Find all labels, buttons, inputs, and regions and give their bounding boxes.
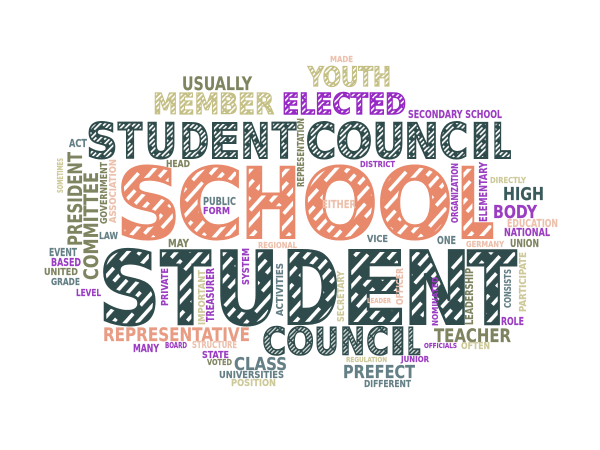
word: CLASS: CLASS (234, 354, 287, 375)
word: STUDENT top: D (180, 114, 209, 170)
word: STRUCTURE: STRUCTURE (192, 340, 237, 351)
word: SCHOOL: C (177, 148, 243, 260)
word: PREFECT: PREFECT (343, 362, 416, 383)
word: COUNCIL lower: O (286, 319, 314, 363)
word: COUNCIL lower: L (407, 319, 420, 363)
word: BASED: BASED (51, 256, 81, 269)
word: OFFICIALS: OFFICIALS (424, 342, 457, 350)
word: STUDENT top: N (241, 114, 270, 170)
word: LEVEL: LEVEL (76, 288, 101, 299)
word: OFFICER: OFFICER (395, 268, 406, 305)
word: PRIVATE: PRIVATE (160, 268, 171, 306)
word: HIGH: HIGH (503, 184, 544, 205)
word: REGIONAL: REGIONAL (258, 240, 297, 250)
word: TEACHER: TEACHER (434, 325, 511, 347)
word: NOMINATED: NOMINATED (430, 277, 440, 326)
word: BOARD: BOARD (165, 340, 187, 350)
word: SECRETARY: SECRETARY (336, 270, 347, 322)
word: GRADE: GRADE (51, 277, 80, 288)
word: COUNCIL lower: C (262, 319, 286, 363)
word: SOMETIMES: SOMETIMES (55, 158, 65, 193)
word: LEADERSHIP: LEADERSHIP (463, 268, 476, 325)
word: COUNCIL top: C (439, 114, 468, 170)
word: CONSISTS: CONSISTS (503, 269, 514, 308)
word: STUDENT top: T (118, 114, 142, 170)
word: MANY: MANY (133, 342, 160, 355)
word: DIFFERENT: DIFFERENT (364, 379, 411, 390)
word: REGULATION: REGULATION (346, 356, 387, 364)
word: COUNCIL lower: U (314, 319, 339, 363)
word: UNITED: UNITED (44, 267, 78, 278)
word: SCHOOL: O (377, 148, 453, 260)
word: EVENT: EVENT (49, 246, 77, 259)
word: COUNCIL top: L (492, 114, 511, 170)
word: STUDENT large: N (403, 230, 471, 348)
word: COUNCIL lower: I (389, 319, 407, 363)
word: GOVERNMENT: GOVERNMENT (99, 162, 110, 224)
word: EDUCATION: EDUCATION (507, 217, 558, 230)
word: COUNCIL top: O (336, 114, 372, 170)
word: REPRESENTATION: REPRESENTATION (296, 118, 307, 187)
word: PARTICIPATE: PARTICIPATE (518, 252, 529, 312)
word: STUDENT top: T (272, 114, 296, 170)
word: REPRESENTATIVE: REPRESENTATIVE (103, 324, 250, 346)
word: VICE: VICE (367, 234, 388, 245)
word: STUDENT large: T (468, 230, 517, 348)
word: UNION: UNION (510, 237, 539, 250)
word: BODY: BODY (493, 202, 538, 223)
word: SCHOOL: L (457, 148, 494, 260)
word: LAW: LAW (99, 231, 118, 242)
word: SECONDARY SCHOOL: SECONDARY SCHOOL (408, 108, 502, 121)
word: NATIONAL: NATIONAL (504, 226, 550, 239)
word: DISTRICT: DISTRICT (360, 159, 395, 169)
word: PRESIDENT: PRESIDENT (64, 152, 87, 246)
word: ELECTED: ELECTED (282, 88, 406, 121)
word: STUDENT large: D (282, 230, 340, 348)
word: STUDENT top: U (145, 114, 177, 170)
word: OFTEN: OFTEN (461, 341, 490, 352)
word: JUNIOR: JUNIOR (400, 354, 430, 364)
word: TREASURER: TREASURER (204, 268, 217, 322)
word: STATE: STATE (202, 350, 229, 361)
word: IMPORTANT: IMPORTANT (197, 270, 208, 325)
word: COUNCIL top: N (404, 114, 439, 170)
word: ELEMENTARY: ELEMENTARY (477, 161, 490, 222)
word: YOUTH: YOUTH (307, 62, 391, 93)
word: STUDENT large: U (214, 230, 279, 348)
word: COUNCIL lower: N (340, 319, 365, 363)
word: USUALLY: USUALLY (182, 73, 252, 95)
word: SCHOOL: O (302, 148, 378, 260)
word: COUNCIL top: U (373, 114, 405, 170)
word: ACT: ACT (69, 137, 87, 150)
word: GERMANY: GERMANY (466, 239, 505, 249)
word: ONE: ONE (437, 234, 456, 247)
word: POSITION: POSITION (231, 378, 276, 389)
word: LEADER: LEADER (367, 297, 392, 305)
word: ORGANIZATION: ORGANIZATION (450, 163, 461, 223)
word: MEMBER: MEMBER (153, 88, 274, 121)
word: COUNCIL lower: C (366, 319, 389, 363)
word: MADE: MADE (330, 54, 353, 64)
word: STUDENT large: E (341, 230, 408, 348)
word: SYSTEM: SYSTEM (241, 248, 252, 285)
word: VOTED: VOTED (207, 357, 232, 367)
word: SCHOOL: H (241, 148, 301, 260)
word: STUDENT top: E (209, 114, 240, 170)
word: COUNCIL top: C (306, 114, 336, 170)
word: EITHER: EITHER (322, 198, 356, 211)
word: PUBLIC: PUBLIC (203, 195, 236, 208)
word: DIRECTLY: DIRECTLY (490, 175, 527, 185)
word: COUNCIL top: I (469, 114, 493, 170)
word: ASSOCIATION: ASSOCIATION (108, 159, 119, 223)
word: FORM: FORM (203, 206, 230, 217)
word: STUDENT large: S (98, 230, 161, 348)
word: SCHOOL: S (116, 148, 181, 260)
word: STUDENT large: T (160, 230, 211, 348)
word: ROLE: ROLE (501, 315, 524, 328)
word: COMMITTEE: COMMITTEE (80, 172, 103, 280)
word: MAY: MAY (168, 237, 190, 250)
word: STUDENT top: S (86, 114, 118, 170)
word: ACTIVITIES: ACTIVITIES (275, 263, 286, 316)
word: UNIVERSITIES: UNIVERSITIES (219, 370, 284, 381)
word: HEAD: HEAD (166, 159, 190, 170)
